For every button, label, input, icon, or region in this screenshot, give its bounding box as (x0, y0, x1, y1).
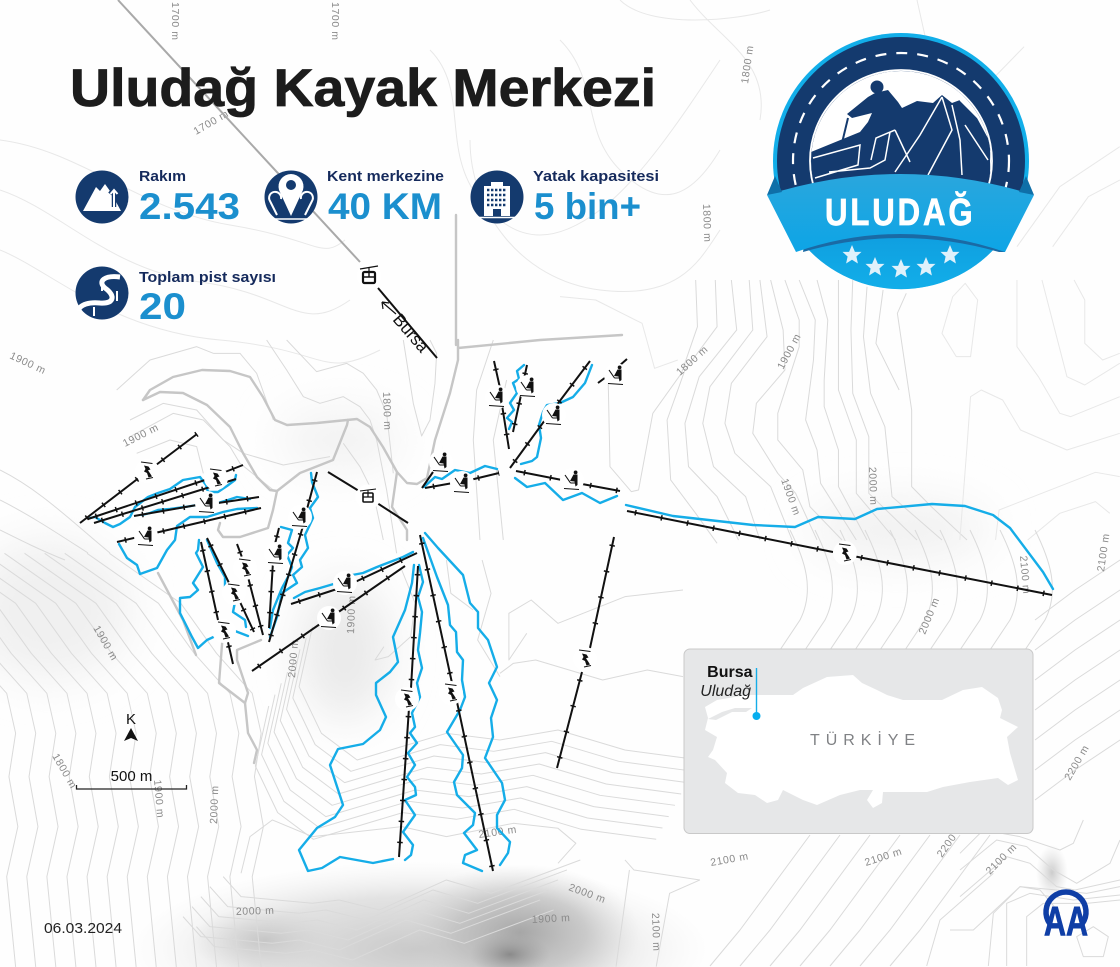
map: Türkiye (705, 675, 1018, 808)
elevation labels: 2200 m (1062, 743, 1092, 782)
elevation labels: 2100 m (649, 913, 662, 952)
contours: central basin (117, 340, 507, 553)
badge: Uludağ (767, 33, 1034, 289)
elevation labels: 1900 m (151, 779, 166, 819)
stat: bed capacity (470, 169, 659, 227)
stat: total pistes: Toplam pist sayısı (139, 270, 276, 286)
title: Uludağ Kayak Merkezi (70, 59, 656, 118)
elevation labels: 1900 m (775, 332, 804, 371)
contours: north-west, faint (0, 0, 770, 363)
elevation labels: 1800 m (700, 204, 713, 243)
elevation labels: 1800 m (49, 752, 79, 791)
elevation labels: 2000 m (286, 639, 301, 678)
ribbon (767, 174, 1034, 252)
elevation labels: 1900 m (345, 595, 358, 634)
scale bar (76, 768, 186, 789)
lower band with stars (806, 236, 996, 289)
elevation labels: 2100 m (863, 846, 904, 869)
elevation labels: 2000 m (567, 882, 607, 906)
elevation labels: 2100 m (709, 850, 750, 869)
stat: bed capacity: 5 bin+ (534, 186, 641, 227)
gondola line to Bursa (118, 0, 437, 358)
stat: bed capacity: Yatak kapasitesi (533, 169, 659, 185)
contours: top and north-east, faint (560, 0, 1120, 540)
elevation labels: 2100 m (1095, 532, 1112, 572)
stat: distance to city centre: Kent merkezine (327, 169, 444, 185)
elevation labels: 1900 m (8, 350, 48, 377)
skier and mountain silhouette (811, 80, 990, 190)
location pin (752, 668, 760, 720)
stars (842, 245, 960, 278)
elevation labels: 1800 m (739, 44, 756, 84)
elevation labels: 2000 m (236, 905, 275, 918)
elevation labels: 2100 m (478, 824, 518, 841)
contours: lower-left slope (0, 553, 700, 967)
icon: mountain (76, 170, 128, 224)
elevation labels: 1800 m (380, 392, 393, 431)
elevation labels: 2000 m (917, 596, 942, 636)
scale bar: 500 m (111, 768, 152, 785)
ski lifts (80, 359, 1052, 871)
label: Uludağ: Uludağ (700, 683, 751, 700)
stat: total pistes (76, 266, 276, 327)
stat: distance to city centre: 40 KM (328, 186, 442, 227)
stat: distance to city centre (264, 169, 444, 227)
elevation labels: 1900 m (121, 421, 161, 450)
label: Bursa direction: Bursa (389, 310, 433, 357)
elevation labels: 2100 m (984, 841, 1019, 877)
contours: eastern slope (608, 280, 967, 543)
contours: western slope above (0, 470, 110, 560)
sea of Marmara (708, 708, 752, 720)
badge name: ULUDAĞ (825, 190, 973, 234)
stat: altitude: 2.543 (139, 186, 240, 227)
elevation labels: 2000 m (208, 785, 221, 824)
AA logo (1044, 892, 1088, 944)
roads (143, 215, 622, 763)
icon: winding piste (76, 266, 128, 320)
chairlift icons (134, 363, 857, 711)
contours: south-east corner (927, 820, 1120, 966)
ski pistes (90, 365, 1053, 871)
stat: total pistes: 20 (139, 286, 186, 327)
elevation labels: 2200 m (935, 821, 967, 860)
icon: gondola upper (356, 264, 382, 288)
stat: altitude (76, 169, 240, 227)
north arrow: K (126, 711, 136, 728)
arrow: towards Bursa (382, 302, 396, 314)
elevation labels: 2100 m (1017, 555, 1032, 595)
stat: altitude: Rakım (139, 169, 186, 185)
inset locator map (684, 649, 1033, 834)
AA logo: AA (1044, 898, 1088, 944)
label: Bursa: Bursa (707, 664, 753, 681)
north arrow (124, 711, 138, 741)
elevation labels: 2000 m (866, 467, 879, 506)
elevation labels: 1800 m (674, 343, 711, 378)
label: Türkiye: TÜRKİYE (810, 730, 915, 749)
elevation labels: 1900 m (532, 912, 571, 926)
icon: location pin (264, 170, 318, 224)
icon: hotel building (470, 170, 524, 224)
elevation labels: 1900 m (90, 624, 120, 663)
elevation labels: 1700 m (329, 2, 341, 41)
terrain shading (0, 410, 1068, 967)
icon: gondola lower (356, 484, 380, 510)
contours: below the far lift and around the inset (710, 530, 1120, 966)
elevation labels: 1700 m (169, 2, 181, 41)
elevation labels: 1700 m (192, 108, 231, 138)
date: 06.03.2024 (44, 920, 122, 937)
elevation labels: 1900 m (778, 477, 803, 517)
